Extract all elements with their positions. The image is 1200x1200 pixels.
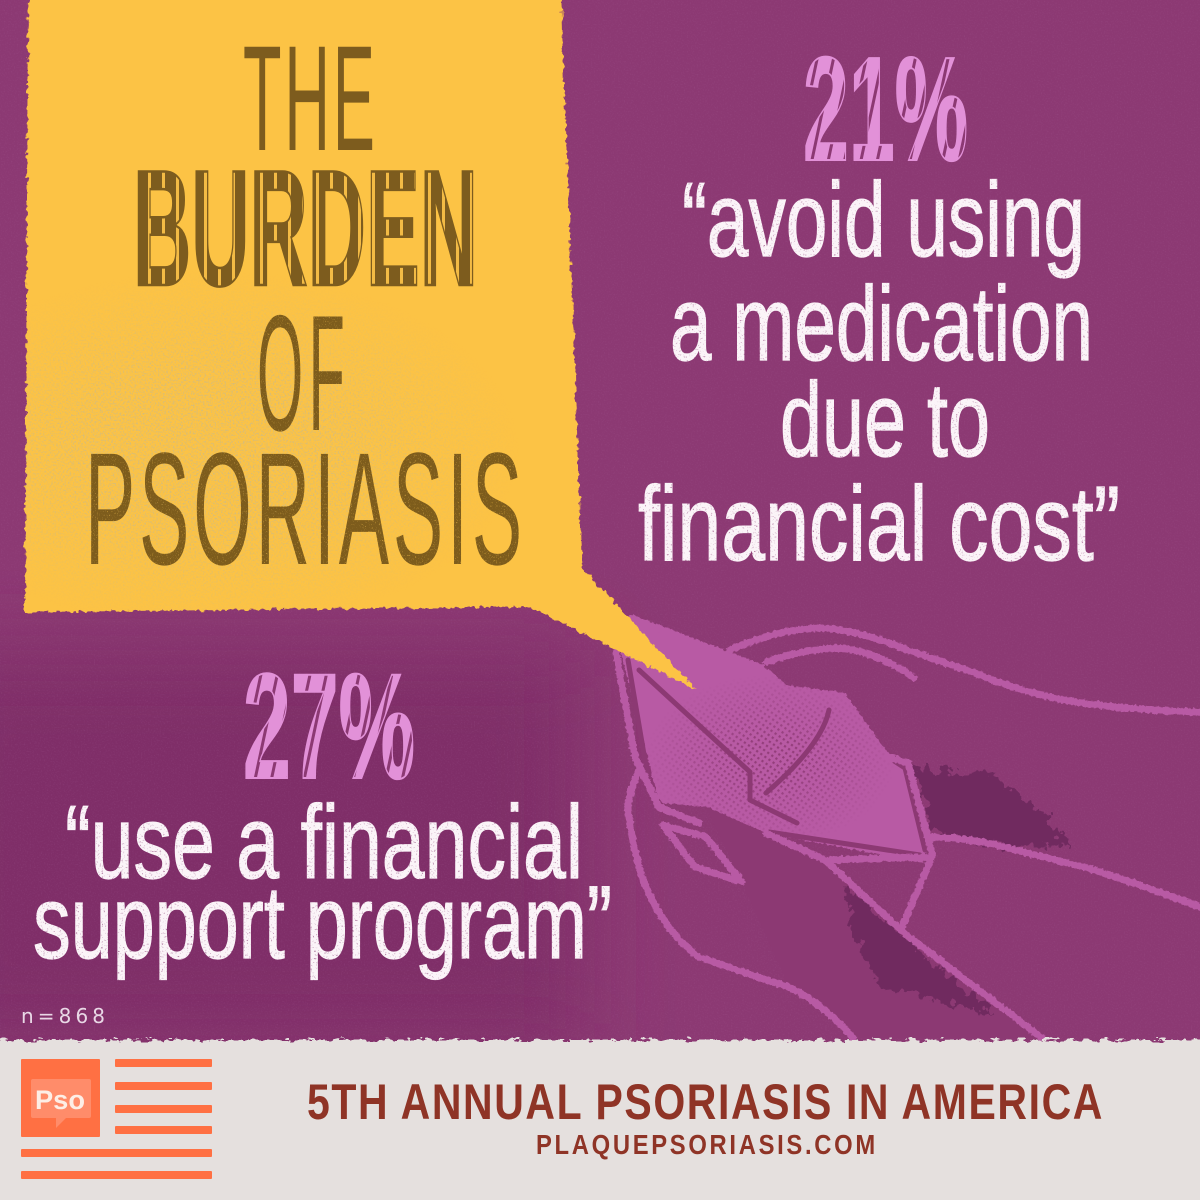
title: BURDEN xyxy=(133,136,478,320)
shadow blobs xyxy=(846,768,1072,1015)
stat: 27%: 27% xyxy=(243,642,415,810)
wallet weave texture xyxy=(662,687,878,832)
footer url: PLAQUEPSORIASIS.COM xyxy=(536,1128,875,1160)
footer title: 5TH ANNUAL PSORIASIS IN AMERICA xyxy=(307,1074,1102,1130)
quote: avoid using a medication: due to xyxy=(780,361,990,479)
hand cutout over wallet xyxy=(706,807,1042,1038)
quote: use a financial support program: support program” xyxy=(33,865,612,981)
title line: THE: THE xyxy=(243,16,375,183)
wallet xyxy=(620,618,928,863)
logo: Pso flag xyxy=(21,1059,212,1179)
quote: use a financial support program xyxy=(33,785,612,981)
illustration: hands holding a wallet xyxy=(616,618,1200,1038)
title line: PSORIASIS: PSORIASIS xyxy=(85,421,522,599)
speech bubble xyxy=(20,0,697,690)
quote: avoid using a medication xyxy=(638,161,1120,583)
logo: Pso flag: Pso xyxy=(35,1085,85,1115)
quote: use a financial support program: “use a financial xyxy=(65,785,583,901)
title xyxy=(85,16,522,599)
sample size note: n=868 xyxy=(21,1004,105,1028)
stat: 21%: 21% xyxy=(803,27,968,192)
bubble speckle texture xyxy=(25,290,484,611)
wallet creases xyxy=(628,660,925,855)
title line: OF: OF xyxy=(257,282,345,466)
hand outlines xyxy=(616,618,1200,1038)
footer band xyxy=(0,1040,1200,1200)
